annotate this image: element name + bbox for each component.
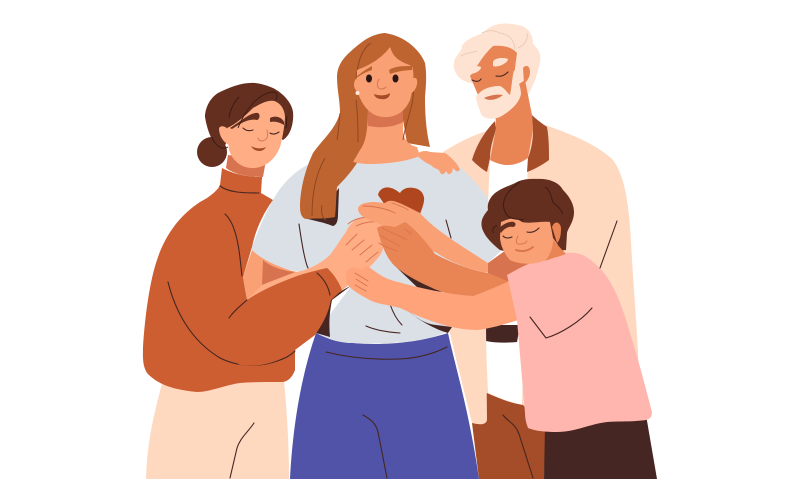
central woman's brows bbox=[356, 66, 412, 77]
boy's nose and smile bbox=[516, 236, 533, 251]
central woman's shirt bbox=[252, 157, 502, 344]
jacket crease bbox=[600, 221, 617, 268]
grandfather mouth bbox=[484, 95, 503, 100]
grandfather trousers bbox=[472, 393, 546, 479]
long hair bbox=[300, 33, 430, 219]
grandfather inner dark lining bbox=[486, 325, 520, 343]
sweater sleeve creases bbox=[229, 273, 330, 318]
central woman's upper arm and hand bbox=[358, 201, 490, 273]
long hair dark tip bbox=[304, 188, 339, 226]
figure: woman in rust sweater trousers bbox=[146, 370, 289, 479]
boy's ear bbox=[552, 223, 561, 243]
central woman's neck and chest bbox=[353, 105, 420, 164]
trouser waist fold bbox=[326, 347, 447, 478]
central woman's face bbox=[357, 47, 413, 117]
grandfather neck and chest bbox=[490, 80, 533, 165]
upper hand lines bbox=[363, 203, 408, 213]
rust sweater body bbox=[143, 168, 295, 392]
boy's neck shadow bbox=[488, 240, 550, 290]
rust sweater arm bbox=[215, 268, 342, 366]
woman's face bbox=[227, 101, 285, 168]
grandfather eyebrows bbox=[470, 58, 508, 74]
arm shadow bbox=[262, 260, 295, 285]
sleeve crease bbox=[530, 308, 592, 338]
grandfather closed eyes bbox=[472, 72, 508, 81]
heart bbox=[378, 187, 424, 218]
grandfather jacket bbox=[440, 122, 640, 420]
arm: central woman's left arm bbox=[243, 250, 330, 300]
grandfather sleeve strip bbox=[448, 325, 487, 424]
central woman's eyes bbox=[366, 74, 398, 82]
woman's hair strands bbox=[212, 92, 287, 148]
grandfather face bbox=[470, 46, 517, 108]
pants crease bbox=[230, 423, 254, 478]
boy's arm and hand bbox=[346, 266, 530, 330]
woman's neck bbox=[226, 155, 266, 177]
central woman's nose bbox=[377, 79, 386, 89]
boy's closed eyes bbox=[503, 228, 539, 238]
grandfather ear bbox=[523, 66, 530, 84]
boy's hair bbox=[481, 179, 574, 255]
woman's brows bbox=[230, 113, 284, 129]
boy's brow bbox=[499, 222, 516, 233]
grandfather hair curls bbox=[461, 31, 527, 56]
boy's shirt bbox=[507, 253, 652, 432]
woman's hair bbox=[205, 83, 293, 148]
rust woman's forearm and hand bbox=[247, 217, 391, 300]
neck shadow bbox=[368, 110, 403, 127]
trouser crease bbox=[503, 415, 533, 478]
boy's neck shade bbox=[545, 240, 566, 261]
figure: woman in centre trousers bbox=[290, 333, 479, 479]
shirt creases bbox=[299, 220, 451, 333]
boy's hand lines bbox=[355, 273, 368, 291]
figure: boy trousers bbox=[544, 415, 657, 479]
grandfather collar right bbox=[527, 115, 549, 172]
grandfather hand lines bbox=[379, 228, 411, 251]
grandfather collar left bbox=[472, 121, 496, 172]
bun bbox=[197, 137, 227, 167]
sweater creases bbox=[168, 186, 295, 365]
woman's closed eyes bbox=[243, 128, 279, 134]
figure: grandfather bbox=[440, 23, 640, 479]
central woman's ears bbox=[354, 78, 417, 93]
boy's hair curls bbox=[493, 182, 563, 233]
woman's nose and smile bbox=[251, 130, 267, 151]
boy's face bbox=[500, 219, 558, 264]
central woman's dark shirt underside bbox=[316, 263, 452, 337]
hand on shoulder bbox=[416, 151, 460, 174]
hair strands bbox=[312, 43, 413, 220]
hand lines bbox=[346, 217, 382, 262]
woman's ear bbox=[219, 126, 232, 146]
grandfather beard bbox=[476, 70, 521, 119]
central woman's mouth bbox=[374, 93, 390, 99]
grandfather hair bbox=[454, 23, 540, 100]
earring bbox=[356, 91, 360, 95]
grandfather arm and hand bbox=[377, 222, 512, 297]
grandfather white shirt bbox=[484, 156, 528, 405]
